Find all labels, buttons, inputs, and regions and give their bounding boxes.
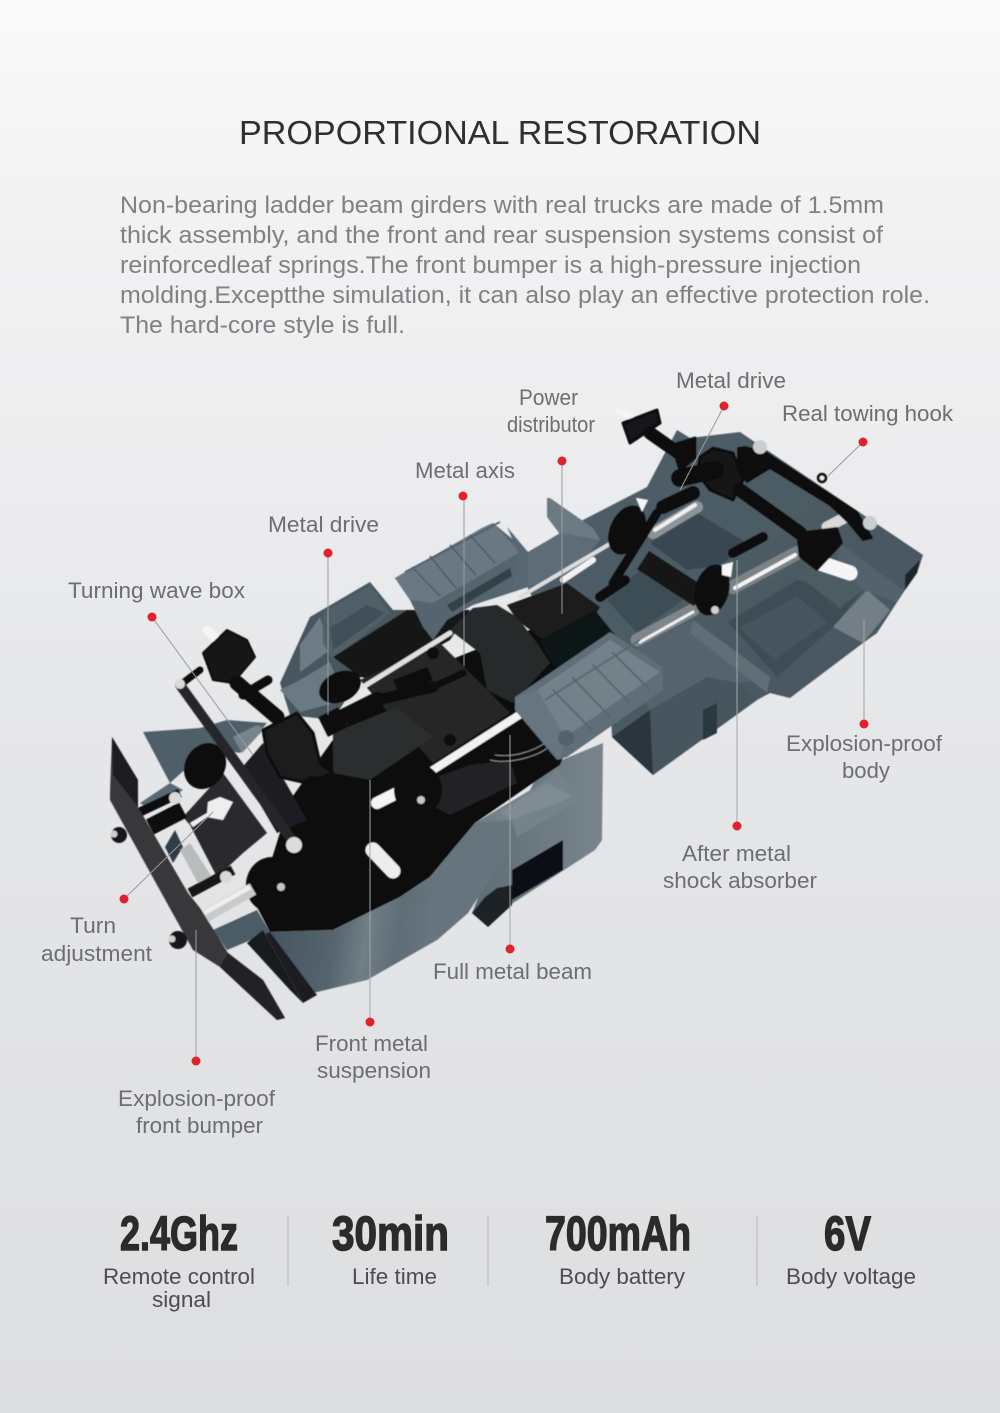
front cross tube: [204, 887, 303, 1003]
callout: real towing hook: [782, 401, 954, 476]
steering plate and servo saver: [140, 720, 442, 913]
front axle assembly: [175, 630, 463, 871]
left fender: [280, 582, 470, 720]
battery box lower: [515, 632, 663, 760]
callout: front metal suspension: Front metal: [315, 1031, 428, 1056]
callout: full metal beam: Full metal beam: [433, 959, 592, 984]
callout: front metal suspension: [315, 780, 431, 1083]
description paragraph: [120, 192, 930, 339]
callout: front metal suspension: suspension: [317, 1058, 431, 1083]
callout: power distributor: [507, 385, 595, 614]
silver rails: [363, 457, 850, 803]
truck chassis illustration: [110, 410, 923, 1020]
description paragraph: reinforcedleaf springs.The front bumper is a high-pressure injection: [120, 252, 861, 279]
callout: power distributor: Power: [519, 385, 578, 410]
callout: after metal shock absorber: After metal: [682, 841, 791, 866]
callout: explosion-proof body: [786, 620, 943, 783]
callout: turning wave box: Turning wave box: [68, 578, 245, 603]
title: PROPORTIONAL RESTORATION: [239, 114, 761, 151]
callout: after metal shock absorber: [663, 560, 817, 893]
description paragraph: The hard-core style is full.: [120, 312, 405, 339]
callout: turn adjustment: [41, 812, 213, 966]
stat: body battery: 700mAh: [545, 1208, 691, 1261]
stat: remote control signal: Remote control: [103, 1264, 255, 1289]
callout: turning wave box: [68, 578, 253, 755]
callout: metal axis: Metal axis: [415, 458, 515, 483]
wires: [490, 743, 547, 761]
stat: body voltage: Body voltage: [786, 1264, 916, 1289]
callout: power distributor: distributor: [507, 412, 595, 437]
stat: life time: 30min: [332, 1208, 449, 1261]
black chassis floor: [257, 620, 610, 932]
description paragraph: Non-bearing ladder beam girders with real trucks are made of 1.5mm: [120, 192, 884, 219]
stat: life time: [332, 1208, 449, 1289]
front lower wing: [263, 770, 582, 1003]
callout: turn adjustment: Turn: [70, 913, 116, 938]
callout: explosion-proof body: body: [842, 758, 890, 783]
description paragraph: thick assembly, and the front and rear suspension systems consist of: [120, 222, 883, 249]
callout: metal drive (front): Metal drive: [268, 512, 379, 537]
callout: explosion-proof body: Explosion-proof: [786, 731, 943, 756]
stat: remote control signal: 2.4Ghz: [120, 1208, 238, 1261]
callout: metal drive (front): [268, 512, 379, 715]
callout: explosion-proof front bumper: front bumper: [136, 1113, 263, 1138]
stat: remote control signal: signal: [152, 1287, 211, 1312]
callout: turn adjustment: adjustment: [41, 941, 152, 966]
callout: metal drive (rear): Metal drive: [676, 368, 786, 393]
stat: remote control signal: [103, 1208, 255, 1312]
callout: explosion-proof front bumper: [118, 930, 276, 1138]
callout: full metal beam: [433, 735, 592, 984]
stat: body voltage: [786, 1208, 916, 1289]
rear body tray: [528, 430, 923, 775]
central transfer case: [450, 583, 635, 703]
callout: real towing hook: Real towing hook: [782, 401, 954, 426]
callout: after metal shock absorber: shock absorber: [663, 868, 817, 893]
stat: body battery: Body battery: [559, 1264, 685, 1289]
battery box upper: [395, 522, 528, 640]
rear axle assembly: [600, 410, 877, 620]
callout: metal axis: [415, 458, 515, 666]
callout: explosion-proof front bumper: Explosion-proof: [118, 1086, 276, 1111]
stat: body battery: [545, 1208, 691, 1289]
stat: body voltage: 6V: [824, 1208, 871, 1261]
side panel under battery: [472, 743, 603, 927]
description paragraph: molding.Exceptthe simulation, it can also play an effective protection role.: [120, 282, 930, 309]
front bumper: [110, 737, 285, 1020]
callout: metal drive (rear): [676, 368, 786, 490]
stat: life time: Life time: [352, 1264, 437, 1289]
